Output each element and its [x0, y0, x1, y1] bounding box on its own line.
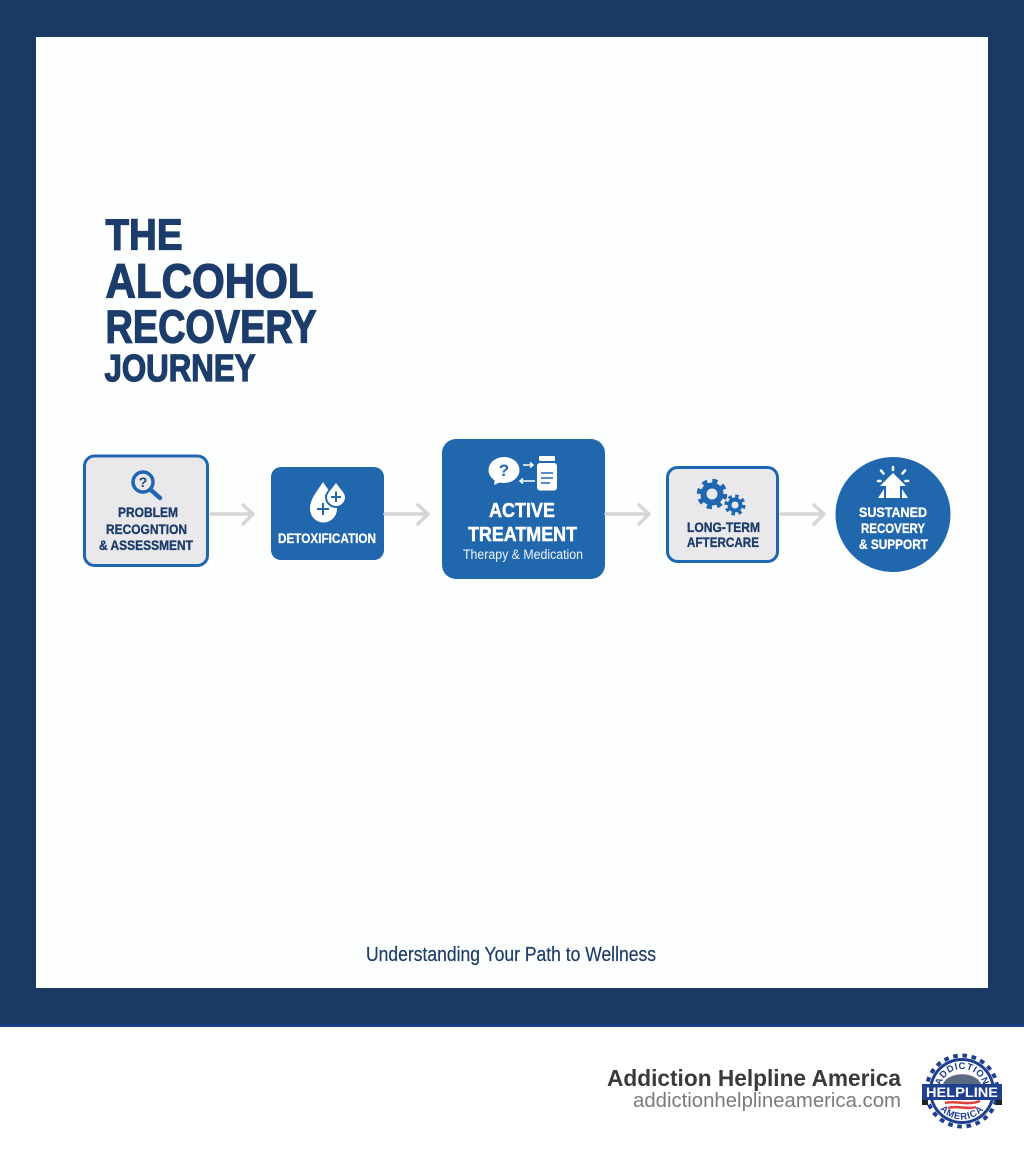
- arrow: step 4 to 5: [781, 505, 824, 524]
- step 1 label: & ASSESSMENT: [99, 537, 193, 553]
- title: THE: [106, 212, 182, 260]
- icon: rising arrow with rays: [878, 467, 908, 498]
- step 5 label: RECOVERY: [861, 520, 926, 536]
- panel: step 2 detoxification: [271, 467, 384, 560]
- step 1 label: [99, 504, 193, 553]
- arrow: step 2 to 3: [385, 505, 428, 524]
- title: JOURNEY: [104, 348, 256, 390]
- panel: step 4 long-term aftercare: [668, 468, 778, 562]
- panel: step 1 problem recognition: [84, 456, 208, 566]
- step 5 label: [859, 504, 928, 552]
- title: [104, 212, 316, 390]
- icon: speech bubble and medication bottle: ?: [499, 461, 509, 480]
- icon: helpline america badge: [922, 1054, 1002, 1128]
- step 4 label: AFTERCARE: [687, 534, 759, 550]
- icon: helpline america badge: HELPLINE: [926, 1085, 998, 1100]
- icon: helpline america badge: ADDICTION: [935, 1062, 990, 1084]
- step 1 label: RECOGNTION: [106, 521, 187, 537]
- title: RECOVERY: [106, 300, 316, 352]
- icon: speech bubble and medication bottle: [488, 456, 557, 490]
- icon: magnifying glass: ?: [139, 474, 147, 490]
- title: ALCOHOL: [106, 254, 314, 308]
- step 5 label: SUSTANED: [859, 504, 927, 520]
- subtitle: Understanding Your Path to Wellness: [366, 944, 656, 966]
- footer brand text: Addiction Helpline America: [607, 1065, 901, 1091]
- step 3 label: Therapy & Medication: [463, 547, 583, 562]
- step 3 label: [463, 500, 583, 562]
- panel: step 3 active treatment: [442, 439, 605, 579]
- icon: helpline america badge: AMERICA: [940, 1106, 984, 1120]
- step 3 label: ACTIVE: [489, 500, 555, 522]
- arrow: step 1 to 2: [211, 505, 253, 524]
- step 3 label: TREATMENT: [468, 524, 577, 546]
- step 5 label: & SUPPORT: [859, 536, 928, 552]
- panel: step 5 sustained recovery: [836, 457, 950, 572]
- step 1 label: PROBLEM: [118, 504, 178, 520]
- step 4 label: [687, 519, 760, 550]
- footer brand text: addictionhelplineamerica.com: [633, 1090, 901, 1112]
- arrow: step 3 to 4: [606, 505, 649, 524]
- step 4 label: LONG-TERM: [687, 519, 760, 535]
- icon: gears: [699, 481, 744, 514]
- step 2 label: DETOXIFICATION: [278, 530, 376, 546]
- icon: water drops: [310, 480, 347, 522]
- footer brand text: [607, 1065, 901, 1112]
